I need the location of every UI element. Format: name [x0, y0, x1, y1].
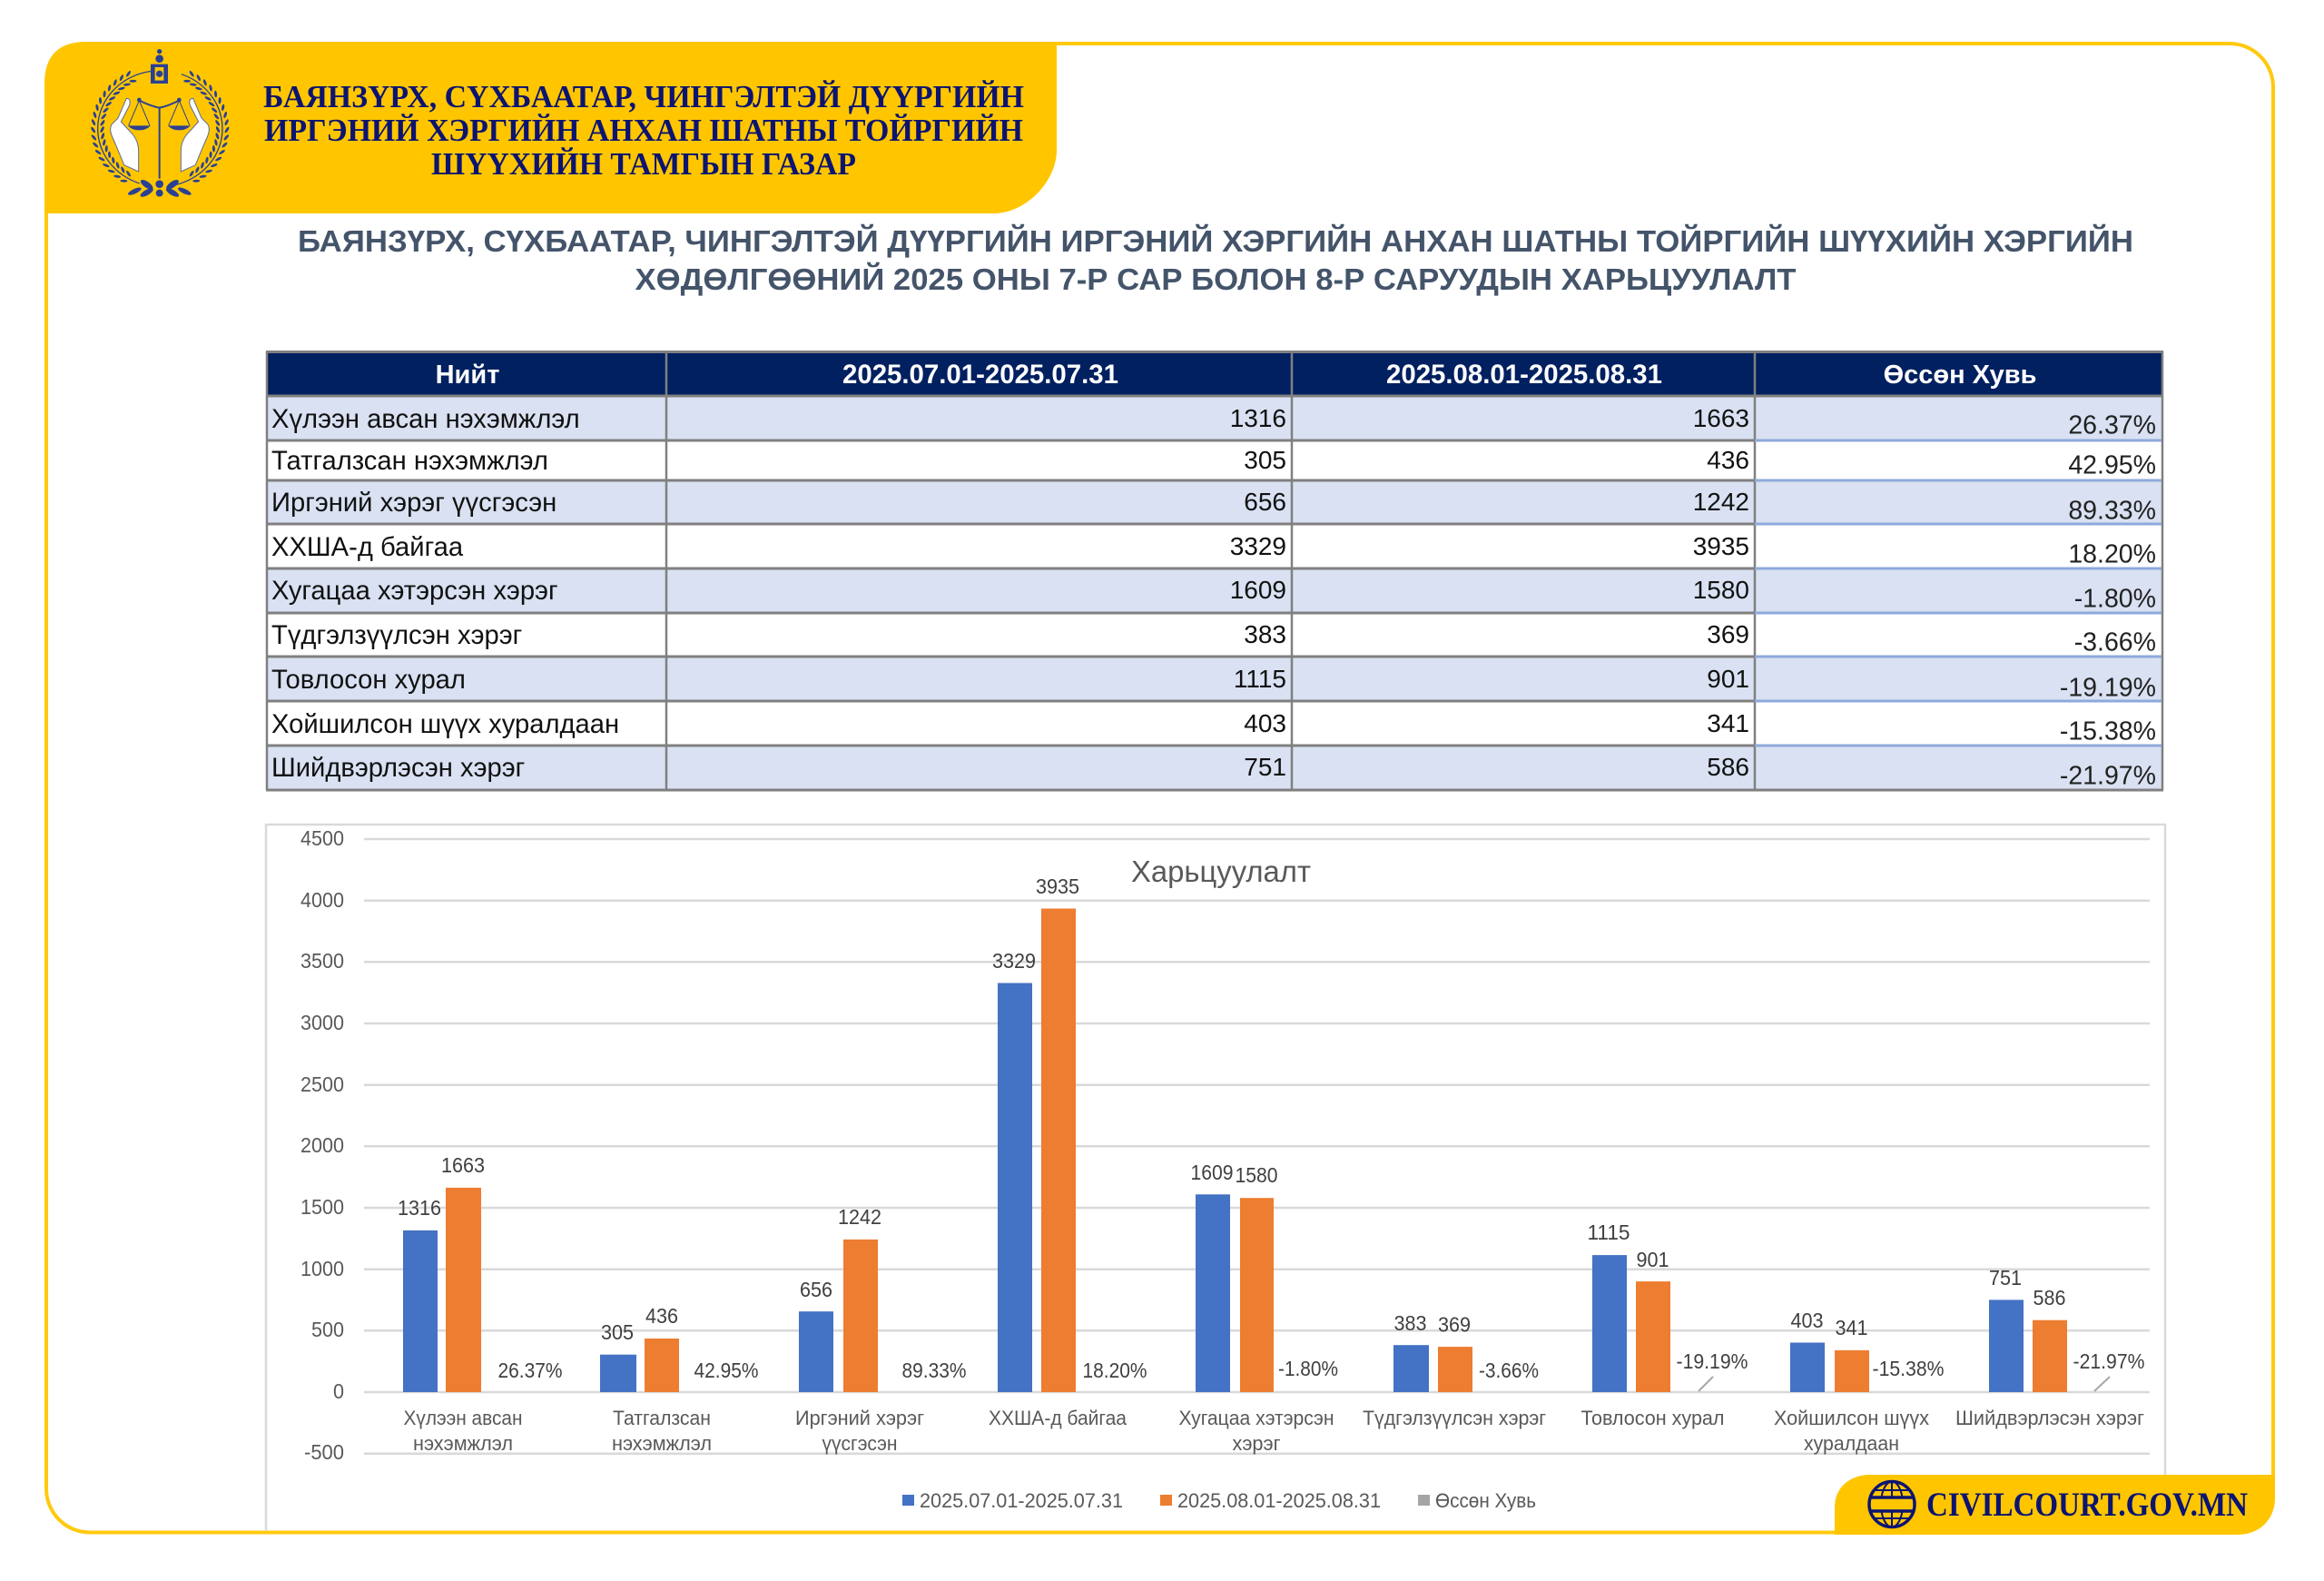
group: Хүлээн авсан нэхэмжлэл: Хүлээн авсан — [403, 1407, 523, 1429]
row: Хүлээн авсан нэхэмжлэл: 1316 — [1230, 404, 1286, 432]
group: Хүлээн авсан нэхэмжлэл: 1316 — [398, 1196, 441, 1220]
y axis labels: 0 — [333, 1379, 344, 1403]
group: Татгалзсан нэхэмжлэл: 436 — [645, 1304, 678, 1328]
row: Шийдвэрлэсэн хэрэг: Шийдвэрлэсэн хэрэг — [271, 754, 525, 783]
y axis labels: 1500 — [300, 1195, 344, 1219]
group: Татгалзсан нэхэмжлэл: 42.95% — [694, 1359, 759, 1382]
group: Хойшилсон шүүх хуралдаан — [1774, 1309, 1945, 1455]
group: Товлосон хурал: 1115 — [1587, 1220, 1630, 1244]
group: Түдгэлзүүлсэн хэрэг: 369 — [1438, 1313, 1471, 1337]
group: Түдгэлзүүлсэн хэрэг: Түдгэлзүүлсэн хэрэг — [1363, 1407, 1546, 1429]
row: Шийдвэрлэсэн хэрэг — [271, 753, 2156, 790]
group: ХХША-д байгаа: 3329 — [992, 949, 1036, 973]
row: Хугацаа хэтэрсэн хэрэг: -1.80% — [2074, 585, 2156, 614]
row: Шийдвэрлэсэн хэрэг: -21.97% — [2060, 761, 2156, 790]
row: Түдгэлзүүлсэн хэрэг: -3.66% — [2074, 628, 2156, 657]
group: Шийдвэрлэсэн хэрэг — [1955, 1266, 2144, 1429]
group: Хойшилсон шүүх хуралдаан: 341 — [1836, 1316, 1868, 1339]
row: Хүлээн авсан нэхэмжлэл: 1663 — [1693, 404, 1749, 432]
table header row: Өссөн Хувь — [1884, 361, 2036, 390]
row: Хойшилсон шүүх хуралдаан: 341 — [1707, 709, 1749, 737]
group: Түдгэлзүүлсэн хэрэг: 383 — [1394, 1311, 1427, 1335]
chart legend: 2025.08.01-2025.08.31 — [1177, 1489, 1381, 1512]
group: Иргэний хэрэг үүсгэсэн — [795, 1205, 966, 1455]
row: Хугацаа хэтэрсэн хэрэг: 1580 — [1693, 576, 1749, 604]
group: Хойшилсон шүүх хуралдаан: хуралдаан — [1804, 1432, 1899, 1455]
y axis labels: 500 — [311, 1318, 344, 1341]
row: Татгалзсан нэхэмжлэл: Татгалзсан нэхэмжлэл — [271, 447, 548, 476]
bar chart: comparison — [266, 825, 2165, 1531]
table header row — [266, 351, 2163, 396]
main title — [298, 223, 2133, 297]
group: Шийдвэрлэсэн хэрэг: -21.97% — [2073, 1349, 2144, 1373]
row: Татгалзсан нэхэмжлэл: 436 — [1707, 446, 1749, 474]
row: Түдгэлзүүлсэн хэрэг: 383 — [1244, 620, 1286, 648]
banner heading — [263, 79, 1024, 182]
group: Татгалзсан нэхэмжлэл: 305 — [601, 1320, 634, 1344]
chart legend: Өссөн Хувь — [1435, 1489, 1536, 1512]
group: Хугацаа хэтэрсэн хэрэг: Хугацаа хэтэрсэн — [1178, 1407, 1334, 1429]
row: Татгалзсан нэхэмжлэл: 42.95% — [2068, 450, 2156, 479]
y axis labels — [300, 826, 344, 1464]
group: Хугацаа хэтэрсэн хэрэг — [1178, 1161, 1338, 1455]
group: Хугацаа хэтэрсэн хэрэг: 1580 — [1235, 1163, 1278, 1187]
group: Татгалзсан нэхэмжлэл: нэхэмжлэл — [612, 1432, 712, 1455]
row: Иргэний хэрэг үүсгэсэн: Иргэний хэрэг үүсгэсэн — [271, 489, 556, 518]
row: ХХША-д байгаа: 3329 — [1230, 532, 1286, 560]
row: Шийдвэрлэсэн хэрэг: 586 — [1707, 753, 1749, 781]
group: Түдгэлзүүлсэн хэрэг — [1363, 1311, 1546, 1429]
group: Шийдвэрлэсэн хэрэг: Шийдвэрлэсэн хэрэг — [1955, 1407, 2144, 1429]
group: Хойшилсон шүүх хуралдаан: Хойшилсон шүүх — [1774, 1407, 1929, 1429]
row: Хойшилсон шүүх хуралдаан: -15.38% — [2060, 717, 2156, 746]
group: Хугацаа хэтэрсэн хэрэг: -1.80% — [1278, 1357, 1338, 1380]
group: ХХША-д байгаа: 18.20% — [1082, 1359, 1147, 1382]
group: Хүлээн авсан нэхэмжлэл: 1663 — [441, 1153, 485, 1177]
footer badge: website — [1835, 1475, 2275, 1535]
group: Товлосон хурал: Товлосон хурал — [1581, 1407, 1725, 1429]
group: Иргэний хэрэг үүсгэсэн: 89.33% — [902, 1359, 966, 1382]
row: Товлосон хурал: 901 — [1707, 665, 1749, 693]
row: Иргэний хэрэг үүсгэсэн: 89.33% — [2068, 496, 2156, 525]
row: ХХША-д байгаа: 18.20% — [2068, 539, 2156, 568]
group: Татгалзсан нэхэмжлэл: Татгалзсан — [613, 1407, 711, 1429]
table row shading — [266, 396, 2163, 790]
group: Хүлээн авсан нэхэмжлэл: нэхэмжлэл — [413, 1432, 513, 1455]
table header row: Нийт — [436, 361, 499, 390]
row: Түдгэлзүүлсэн хэрэг: 369 — [1707, 620, 1749, 648]
row: Татгалзсан нэхэмжлэл: 305 — [1244, 446, 1286, 474]
main title: ХӨДӨЛГӨӨНИЙ 2025 ОНЫ 7-Р САР БОЛОН 8-Р САРУУДЫН ХАРЬЦУУЛАЛТ — [635, 262, 1797, 297]
row: Иргэний хэрэг үүсгэсэн: 1242 — [1693, 488, 1749, 516]
row: ХХША-д байгаа — [271, 532, 2156, 568]
group: Иргэний хэрэг үүсгэсэн: 1242 — [838, 1205, 881, 1229]
row: Хугацаа хэтэрсэн хэрэг: Хугацаа хэтэрсэн хэрэг — [271, 577, 558, 606]
group: Шийдвэрлэсэн хэрэг: 586 — [2034, 1286, 2066, 1309]
main title: БАЯНЗҮРХ, СҮХБААТАР, ЧИНГЭЛТЭЙ ДҮҮРГИЙН ИРГЭНИЙ ХЭРГИЙН АНХАН ШАТНЫ ТОЙРГИЙН ШҮҮХИЙН ХЭРГИЙН — [298, 223, 2133, 259]
y axis labels: 4500 — [300, 826, 344, 850]
row: Хойшилсон шүүх хуралдаан: Хойшилсон шүүх хуралдаан — [271, 710, 619, 739]
group: Хүлээн авсан нэхэмжлэл: 26.37% — [497, 1359, 563, 1382]
group: Хойшилсон шүүх хуралдаан: 403 — [1790, 1309, 1823, 1332]
banner heading: ИРГЭНИЙ ХЭРГИЙН АНХАН ШАТНЫ ТОЙРГИЙН — [264, 113, 1023, 148]
row: Хүлээн авсан нэхэмжлэл: Хүлээн авсан нэхэмжлэл — [271, 405, 580, 434]
row: Товлосон хурал: 1115 — [1234, 665, 1286, 693]
group: Хүлээн авсан нэхэмжлэл — [398, 1153, 563, 1455]
row: Түдгэлзүүлсэн хэрэг — [271, 620, 2156, 657]
table header row: 2025.07.01-2025.07.31 — [842, 360, 1118, 390]
icon: court emblem — [80, 49, 240, 203]
data table — [266, 351, 2163, 790]
row: Хүлээн авсан нэхэмжлэл: 26.37% — [2068, 410, 2156, 440]
row: Хугацаа хэтэрсэн хэрэг — [271, 576, 2156, 614]
group: Шийдвэрлэсэн хэрэг: 751 — [1989, 1266, 2022, 1290]
group: Товлосон хурал: 901 — [1636, 1248, 1669, 1271]
banner heading: ШҮҮХИЙН ТАМГЫН ГАЗАР — [431, 146, 856, 182]
chart title: Харьцуулалт — [1131, 855, 1311, 888]
row: Иргэний хэрэг үүсгэсэн: 656 — [1244, 488, 1286, 516]
y axis labels: 2000 — [300, 1133, 344, 1157]
group: Товлосон хурал: -19.19% — [1676, 1349, 1748, 1373]
row: Хүлээн авсан нэхэмжлэл — [271, 404, 2156, 440]
group: Түдгэлзүүлсэн хэрэг: -3.66% — [1479, 1359, 1539, 1382]
group: Иргэний хэрэг үүсгэсэн: үүсгэсэн — [822, 1432, 897, 1455]
row: Шийдвэрлэсэн хэрэг: 751 — [1244, 753, 1286, 781]
group: Хугацаа хэтэрсэн хэрэг: 1609 — [1191, 1161, 1233, 1184]
group: Иргэний хэрэг үүсгэсэн: Иргэний хэрэг — [795, 1407, 924, 1429]
row: Товлосон хурал: -19.19% — [2060, 674, 2156, 703]
chart legend: 2025.07.01-2025.07.31 — [920, 1489, 1123, 1512]
y axis labels: -500 — [304, 1440, 344, 1464]
row: ХХША-д байгаа: ХХША-д байгаа — [271, 533, 464, 562]
group: Хугацаа хэтэрсэн хэрэг: хэрэг — [1233, 1432, 1280, 1455]
header banner — [44, 42, 1057, 213]
banner heading: БАЯНЗҮРХ, СҮХБААТАР, ЧИНГЭЛТЭЙ ДҮҮРГИЙН — [263, 79, 1024, 114]
y axis labels: 1000 — [300, 1257, 344, 1280]
row: Түдгэлзүүлсэн хэрэг: Түдгэлзүүлсэн хэрэг — [271, 621, 522, 650]
y axis labels: 3000 — [300, 1011, 344, 1034]
table header row: 2025.08.01-2025.08.31 — [1386, 360, 1662, 390]
row: ХХША-д байгаа: 3935 — [1693, 532, 1749, 560]
group: ХХША-д байгаа — [989, 874, 1147, 1429]
group: ХХША-д байгаа: 3935 — [1036, 874, 1079, 898]
group: Татгалзсан нэхэмжлэл — [600, 1304, 759, 1455]
row: Хугацаа хэтэрсэн хэрэг: 1609 — [1230, 576, 1286, 604]
row: Хойшилсон шүүх хуралдаан — [271, 709, 2156, 746]
group: Товлосон хурал — [1581, 1220, 1748, 1429]
row: Иргэний хэрэг үүсгэсэн — [271, 488, 2156, 525]
y axis labels: 4000 — [300, 888, 344, 912]
y axis labels: 2500 — [300, 1072, 344, 1096]
icon: globe — [1868, 1481, 1915, 1527]
row: Хойшилсон шүүх хуралдаан: 403 — [1244, 709, 1286, 737]
group: ХХША-д байгаа: ХХША-д байгаа — [989, 1407, 1128, 1429]
row: Товлосон хурал: Товлосон хурал — [271, 666, 466, 695]
y axis labels: 3500 — [300, 949, 344, 973]
group: Хойшилсон шүүх хуралдаан: -15.38% — [1872, 1357, 1945, 1380]
group: Иргэний хэрэг үүсгэсэн: 656 — [800, 1278, 832, 1301]
chart legend — [902, 1489, 1536, 1512]
website address: CIVILCOURT.GOV.MN — [1926, 1487, 2248, 1524]
row: Товлосон хурал — [271, 665, 2156, 703]
row: Татгалзсан нэхэмжлэл — [271, 446, 2156, 479]
